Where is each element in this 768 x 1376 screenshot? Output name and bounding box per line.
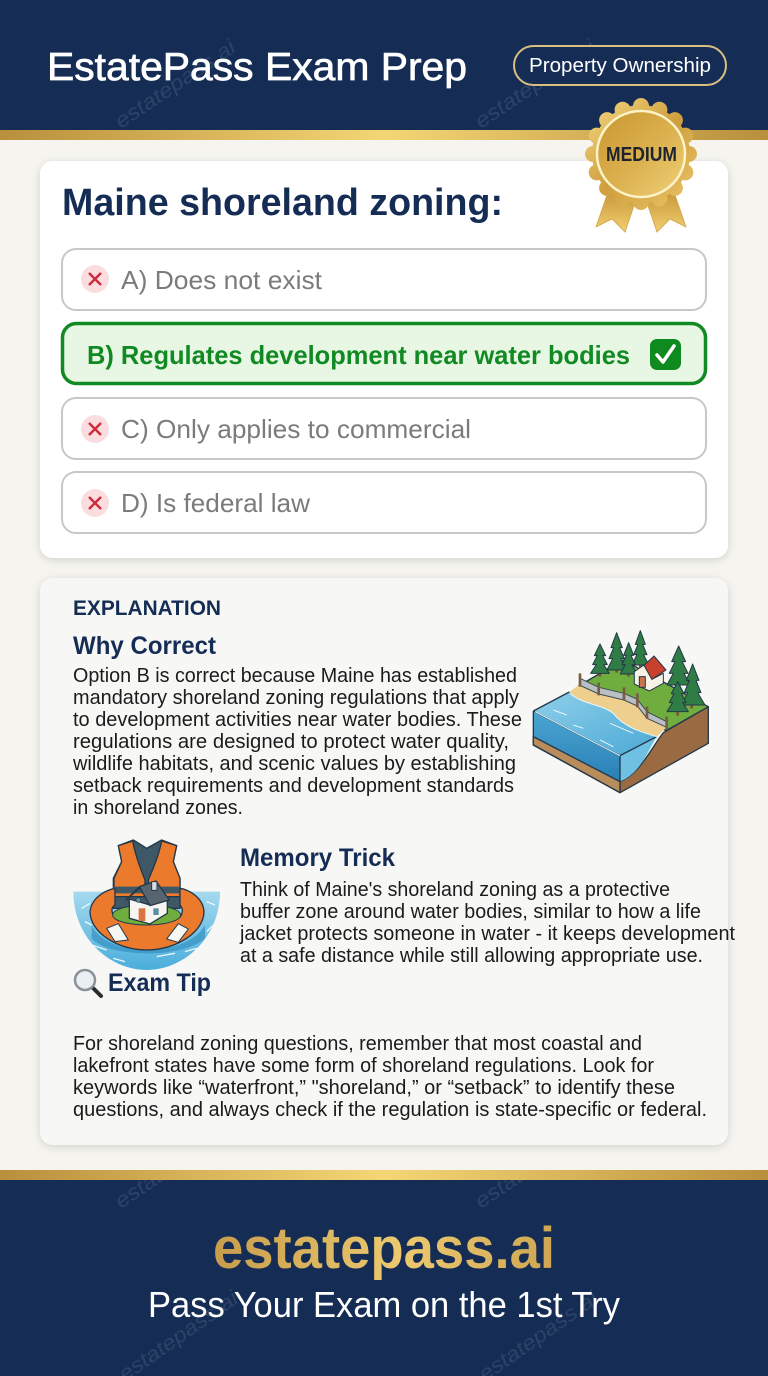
option A <box>62 249 706 310</box>
why correct body: mandatory shoreland zoning regulations that apply <box>73 687 519 709</box>
small house <box>634 656 666 691</box>
memory trick heading: Memory Trick <box>240 844 395 872</box>
option B correct: B) Regulates development near water bodies <box>87 340 630 370</box>
why correct body: in shoreland zones. <box>73 797 243 819</box>
question card <box>40 161 728 558</box>
why correct body: wildlife habitats, and scenic values by establishing <box>72 753 516 775</box>
watermarks: estatepass.ai <box>471 1115 601 1213</box>
option D <box>62 472 706 533</box>
option C <box>62 398 706 459</box>
memory trick body: at a safe distance while still allowing appropriate use. <box>240 945 703 967</box>
why correct body: setback requirements and development standards <box>73 775 514 797</box>
difficulty medal: MEDIUM <box>606 144 677 166</box>
why correct body: to development activities near water bodies. These <box>73 709 522 731</box>
why correct heading: Why Correct <box>73 632 217 660</box>
icon: life jacket house <box>73 840 220 970</box>
exam tip body: keywords like “waterfront,” "shoreland,” or “setback” to identify these <box>73 1077 675 1099</box>
watermarks: estatepass.ai <box>111 35 241 133</box>
header band <box>0 0 768 140</box>
memory trick body <box>239 879 735 967</box>
option D: D) Is federal law <box>121 488 310 518</box>
difficulty medal <box>585 98 697 232</box>
memory trick body: Think of Maine's shoreland zoning as a protective <box>240 879 670 901</box>
option C: C) Only applies to commercial <box>121 414 471 444</box>
option B correct <box>62 324 706 384</box>
question heading: Maine shoreland zoning: <box>62 182 503 224</box>
category pill: Property Ownership <box>529 55 711 77</box>
icon: magnifier <box>75 970 101 996</box>
explanation card <box>40 578 735 1145</box>
why correct body: Option B is correct because Maine has established <box>73 665 517 687</box>
why correct body: regulations are designed to protect water quality, <box>73 731 509 753</box>
exam tip body: lakefront states have some form of shoreland regulations. Look for <box>73 1055 654 1077</box>
memory trick body: buffer zone around water bodies, similar to how a life <box>240 901 701 923</box>
footer brand: estatepass.ai <box>213 1216 555 1281</box>
exam tip body: questions, and always check if the regulation is state-specific or federal. <box>73 1099 707 1121</box>
icon: shoreland block <box>533 631 708 793</box>
option A: A) Does not exist <box>121 265 323 295</box>
exam tip body <box>73 1033 707 1121</box>
header title: EstatePass Exam Prep <box>47 46 467 89</box>
why correct body <box>72 665 522 819</box>
watermarks <box>111 35 604 1376</box>
exam tip body: For shoreland zoning questions, remember that most coastal and <box>73 1033 642 1055</box>
explanation label: EXPLANATION <box>73 597 221 620</box>
watermarks: estatepass.ai <box>471 35 601 133</box>
category pill <box>514 46 726 85</box>
memory trick body: jacket protects someone in water - it keeps development <box>239 923 735 945</box>
footer band <box>0 1170 768 1376</box>
tree cluster <box>591 631 705 716</box>
watermarks: estatepass.ai <box>111 1115 241 1213</box>
exam tip heading: Exam Tip <box>108 969 211 997</box>
footer tagline: Pass Your Exam on the 1st Try <box>148 1284 620 1325</box>
